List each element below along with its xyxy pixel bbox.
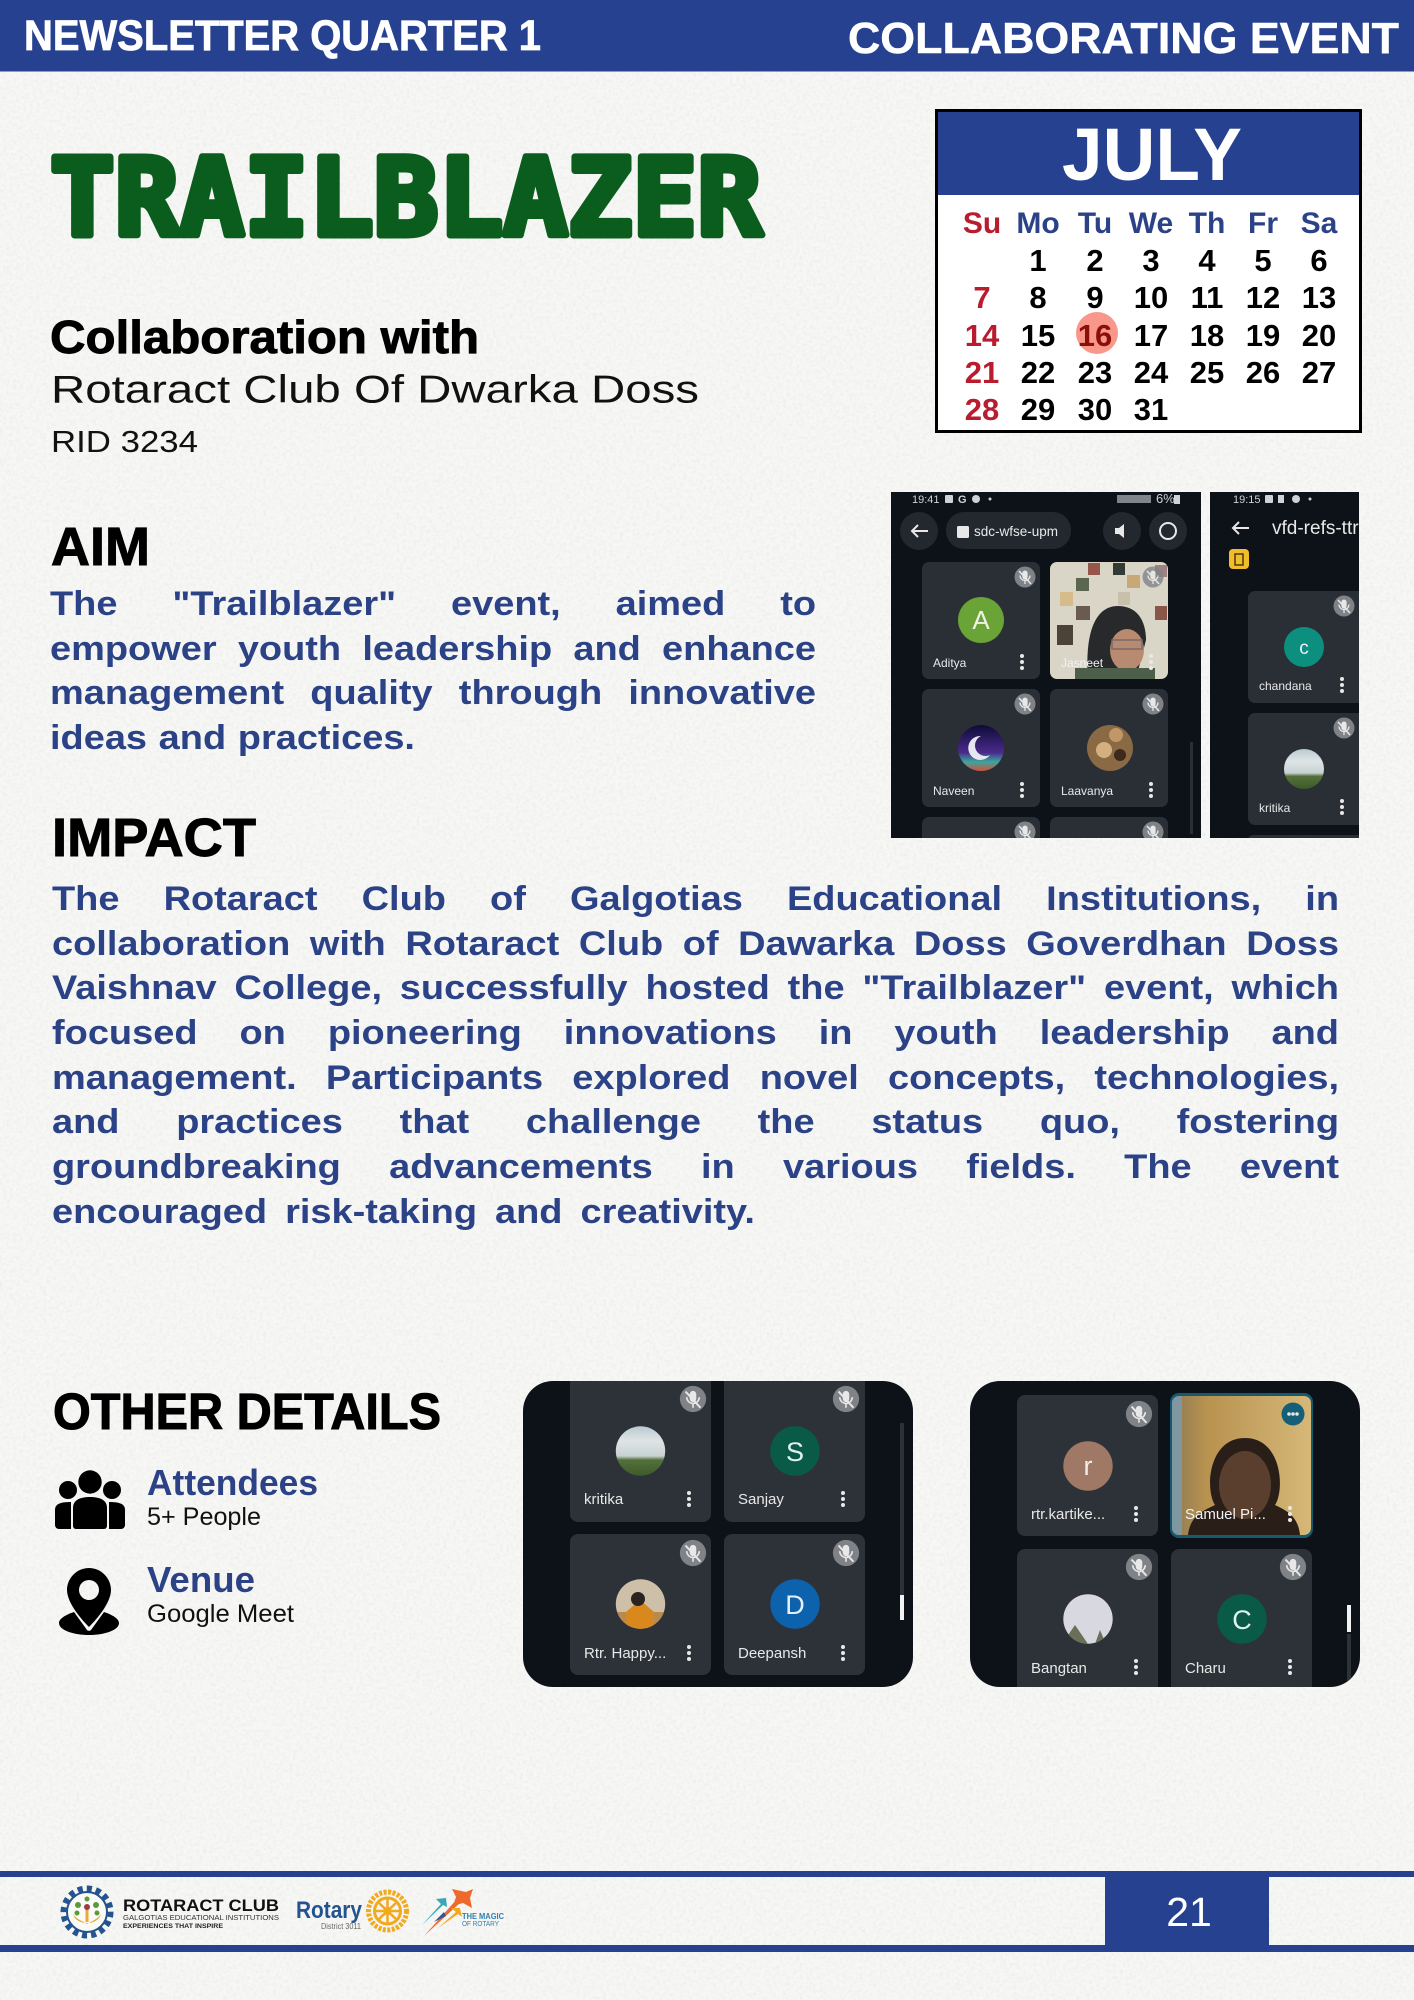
tile: chandana (1248, 591, 1359, 703)
tile: Deepansh: Deepansh (738, 1645, 806, 1662)
logo: The Magic of Rotary (422, 1889, 504, 1936)
collaboration club name: Rotaract Club Of Dwarka Doss (51, 368, 699, 412)
calendar dates: 9 (1086, 280, 1104, 315)
impact paragraph: focused on pioneering innovations in youth leadership and (52, 1014, 1339, 1052)
tile: chandana: c (1299, 638, 1309, 659)
calendar dates (965, 243, 1336, 427)
calendar dates: 1 (1029, 243, 1047, 278)
calendar dates: 16 (1078, 318, 1112, 353)
impact paragraph (52, 880, 1339, 1231)
calendar dates: 17 (1134, 318, 1168, 353)
collaboration heading: Collaboration with (50, 311, 479, 363)
impact paragraph: encouraged risk-taking and creativity. (52, 1193, 755, 1231)
aim paragraph: The "Trailblazer" event, aimed to (50, 585, 816, 623)
screenshot: meeting grid two: 19:15 (1233, 494, 1261, 506)
calendar dates: 10 (1134, 280, 1168, 315)
tile: Jasneet (1050, 562, 1168, 679)
tile: Laavanya (1050, 689, 1168, 807)
attendees value: 5+ People (147, 1503, 261, 1531)
calendar dates: 12 (1246, 280, 1280, 315)
toolbar: sdc-wfse-upm (974, 524, 1058, 539)
AIM heading: AIM (51, 517, 150, 577)
highlighted date (1076, 312, 1118, 354)
calendar dates: 26 (1246, 355, 1280, 390)
tile: Bangtan: Bangtan (1031, 1660, 1087, 1677)
impact paragraph: The Rotaract Club of Galgotias Educational Institutions, in (52, 880, 1339, 918)
impact paragraph: groundbreaking advancements in various fields. The event (52, 1148, 1339, 1186)
tile: Charu (1171, 1549, 1312, 1699)
aim paragraph (50, 585, 816, 757)
aim paragraph: empower youth leadership and enhance (50, 630, 816, 668)
page number box: 21 (1166, 1889, 1212, 1935)
calendar dates: 4 (1198, 243, 1216, 278)
calendar dates: 30 (1078, 392, 1112, 427)
other details heading: OTHER DETAILS (53, 1383, 441, 1440)
footer (0, 1871, 1414, 1952)
tile: Jasneet: Jasneet (1061, 656, 1104, 670)
calendar weekday headers: We (1129, 207, 1173, 240)
tile: Rtr. Happy (570, 1534, 711, 1675)
calendar dates: 25 (1190, 355, 1224, 390)
calendar month: JULY (1062, 113, 1242, 196)
calendar weekday headers: Mo (1016, 207, 1060, 240)
tile: Samuel (1170, 1393, 1313, 1538)
logo: Rotaract club: ROTARACT CLUB (123, 1896, 279, 1915)
status bar: 6% (1156, 491, 1175, 506)
tile: kritika (570, 1370, 711, 1522)
screenshot: meeting grid three (523, 1370, 913, 1687)
calendar dates: 18 (1190, 318, 1224, 353)
tile: Rtr. Happy: Rtr. Happy... (584, 1645, 666, 1662)
tile: rtr.kartike: r (1084, 1451, 1092, 1481)
calendar dates: 7 (973, 280, 991, 315)
calendar dates: 29 (1021, 392, 1055, 427)
calendar dates: 31 (1134, 392, 1168, 427)
venue value: Google Meet (147, 1600, 294, 1628)
calendar dates: 15 (1021, 318, 1055, 353)
calendar weekday headers: Th (1189, 207, 1225, 240)
tile: Aditya (922, 562, 1040, 679)
logo: Rotaract club: EXPERIENCES THAT INSPIRE (123, 1923, 224, 1930)
calendar dates: 6 (1310, 243, 1328, 278)
impact paragraph: management. Participants explored novel concepts, technologies, (52, 1059, 1339, 1097)
tile: Charu: Charu (1185, 1660, 1226, 1677)
impact paragraph: Vaishnav College, successfully hosted the "Trailblazer" event, which (52, 969, 1339, 1007)
venue label: Venue (147, 1559, 255, 1600)
calendar dates: 11 (1191, 280, 1223, 315)
calendar dates: 28 (965, 392, 999, 427)
tile: rtr.kartike (1017, 1395, 1158, 1536)
header left title: NEWSLETTER QUARTER 1 (24, 12, 541, 60)
tile: Bangtan (1017, 1549, 1158, 1699)
calendar dates: 23 (1078, 355, 1112, 390)
tile: Deepansh (724, 1534, 865, 1675)
logo: Rotaract club: GALGOTIAS EDUCATIONAL INSTITUTIONS (123, 1913, 279, 1922)
calendar weekday headers (963, 207, 1338, 240)
tile: chandana: chandana (1259, 679, 1312, 693)
attendees label: Attendees (147, 1462, 318, 1503)
calendar dates: 8 (1029, 280, 1047, 315)
logo: The Magic of Rotary: THE MAGIC (462, 1912, 504, 1921)
calendar dates: 2 (1086, 243, 1104, 278)
tile: rtr.kartike: rtr.kartike... (1031, 1506, 1105, 1523)
screenshot: meeting grid one (891, 491, 1201, 847)
calendar (936, 110, 1360, 432)
logo: Rotary: Rotary (296, 1897, 363, 1924)
tile: Naveen (922, 689, 1040, 807)
calendar dates: 19 (1246, 318, 1280, 353)
RID number: RID 3234 (51, 424, 198, 459)
calendar dates: 20 (1302, 318, 1336, 353)
page number box (1105, 1877, 1269, 1946)
icon: location pin (59, 1568, 119, 1635)
calendar dates: 21 (965, 355, 999, 390)
tile: kritika (1248, 713, 1359, 825)
calendar weekday headers: Sa (1301, 207, 1338, 240)
status bar: G (958, 494, 967, 506)
calendar dates: 14 (965, 318, 1000, 353)
impact paragraph: and practices that challenge the status quo, fostering (52, 1103, 1339, 1141)
scrollbar (1347, 1605, 1351, 1687)
tile: kritika: kritika (584, 1491, 624, 1508)
calendar dates: 3 (1142, 243, 1160, 278)
tile: Sanjay: S (786, 1437, 804, 1467)
tile: Aditya: A (972, 605, 990, 635)
tile: kritika: kritika (1259, 801, 1291, 815)
header bar (0, 0, 1414, 72)
status bar: 19:41 (912, 494, 940, 506)
logo: The Magic of Rotary: OF ROTARY (462, 1919, 499, 1928)
header right title: COLLABORATING EVENT (848, 14, 1399, 63)
aim paragraph: ideas and practices. (50, 719, 415, 757)
status bar (912, 494, 1180, 504)
calendar weekday headers: Su (963, 207, 1001, 240)
IMPACT heading: IMPACT (52, 808, 256, 868)
aim paragraph: management quality through innovative (50, 674, 816, 712)
calendar dates: 27 (1302, 355, 1336, 390)
scrollbar (900, 1423, 904, 1620)
title: TRAILBLAZER (50, 137, 763, 261)
tile: Sanjay: Sanjay (738, 1491, 784, 1508)
calendar dates: 13 (1302, 280, 1336, 315)
calendar dates: 24 (1134, 355, 1169, 390)
calendar weekday headers: Fr (1248, 207, 1278, 240)
tile: Deepansh: D (785, 1590, 805, 1620)
partial tiles (922, 817, 1168, 838)
logo: Rotary: District 3011 (321, 1922, 361, 1931)
impact paragraph: collaboration with Rotaract Club of Dawarka Doss Goverdhan Doss (52, 925, 1339, 963)
tile: Charu: C (1232, 1605, 1252, 1635)
screenshot: meeting grid four (970, 1381, 1360, 1699)
tile: Aditya: Aditya (933, 656, 967, 670)
screenshot: meeting grid two (1210, 492, 1359, 838)
tile: Sanjay (724, 1370, 865, 1522)
tile: Naveen: Naveen (933, 784, 974, 798)
calendar dates: 22 (1021, 355, 1055, 390)
tile: Laavanya: Laavanya (1061, 784, 1113, 798)
screenshot: meeting grid two: vfd-refs-ttr (1272, 518, 1359, 539)
icon: people (55, 1470, 125, 1529)
logo: Rotaract club (64, 1889, 279, 1935)
tile: Samuel: Samuel Pi... (1185, 1506, 1266, 1523)
toolbar (900, 512, 1187, 550)
calendar dates: 5 (1254, 243, 1272, 278)
calendar weekday headers: Tu (1078, 207, 1112, 240)
logo: Rotary (296, 1892, 406, 1931)
